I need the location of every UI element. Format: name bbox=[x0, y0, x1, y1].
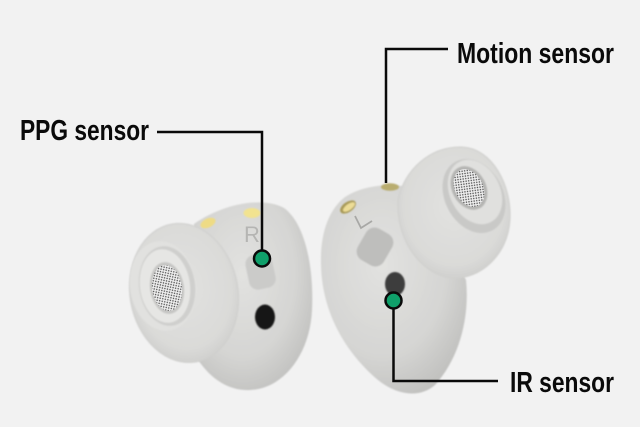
nozzle: left bbox=[430, 148, 518, 244]
right earbud bbox=[119, 202, 312, 390]
label: IR sensor: IR sensor bbox=[510, 367, 614, 399]
leader line: PPG bbox=[157, 132, 262, 255]
leader line: Motion bbox=[386, 49, 448, 183]
speaker mesh: right bbox=[149, 263, 185, 313]
ear tip: right bbox=[119, 215, 249, 371]
yellow contacts: right bbox=[199, 208, 260, 230]
Motion sensor callout bbox=[386, 38, 614, 183]
PPG sensor callout bbox=[20, 115, 270, 266]
earbud body: right bbox=[192, 202, 312, 390]
left earbud bbox=[321, 147, 518, 394]
earbud body: left bbox=[321, 185, 467, 394]
label: PPG sensor: PPG sensor bbox=[20, 115, 149, 147]
green dot: IR bbox=[386, 292, 402, 308]
touch pad: right bbox=[244, 251, 277, 291]
leader line: IR bbox=[394, 305, 498, 381]
speaker mesh: left bbox=[447, 164, 491, 212]
green dot: PPG bbox=[254, 250, 270, 266]
IR window: left bbox=[385, 272, 405, 296]
yellow contacts: left bbox=[338, 183, 399, 216]
ear tip: left bbox=[398, 147, 510, 278]
letter L bbox=[355, 216, 372, 228]
nozzle: right bbox=[124, 237, 202, 335]
letter R: R bbox=[244, 222, 260, 247]
touch pad: left bbox=[353, 224, 397, 270]
IR window: right bbox=[255, 304, 275, 330]
IR sensor callout bbox=[386, 292, 614, 399]
